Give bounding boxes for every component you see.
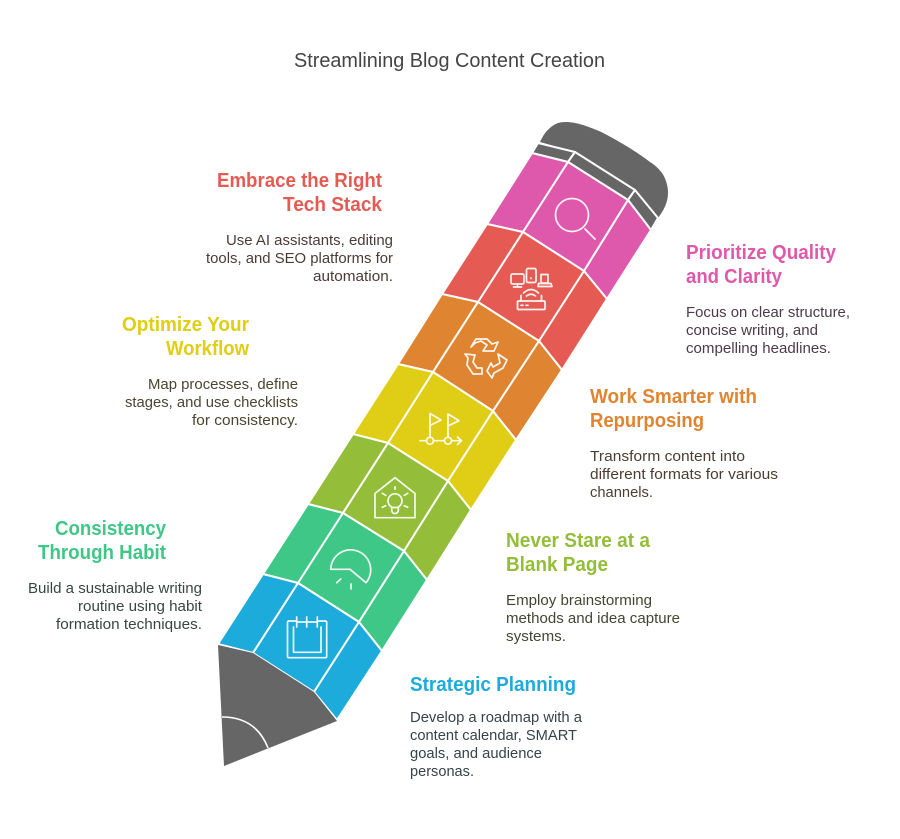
description: goals, and audience	[410, 746, 542, 762]
segment: orange	[398, 294, 562, 440]
description: personas.	[410, 764, 474, 780]
icon: house with light bulb	[375, 478, 415, 518]
icon: magnifier	[556, 198, 595, 239]
heading: Optimize Your	[122, 314, 249, 336]
label: embrace the right tech stack	[206, 170, 393, 285]
heading: Tech Stack	[283, 194, 383, 216]
icon: devices and router	[511, 268, 552, 310]
description	[28, 581, 202, 633]
title: Streamlining Blog Content Creation	[294, 50, 605, 72]
heading	[38, 518, 167, 564]
heading: Strategic Planning	[410, 674, 576, 696]
segment: green	[263, 504, 427, 651]
description	[410, 710, 583, 780]
description: Develop a roadmap with a	[410, 710, 583, 726]
heading	[217, 170, 383, 216]
label: work smarter with repurposing	[590, 386, 778, 501]
description: Focus on clear structure,	[686, 305, 850, 321]
heading: Work Smarter with	[590, 386, 757, 408]
description	[590, 449, 778, 501]
heading	[686, 242, 837, 288]
segment: olive	[308, 434, 471, 580]
description	[206, 233, 393, 285]
description: for consistency.	[192, 413, 298, 429]
label: never stare at a blank page	[506, 530, 680, 645]
segment: pink	[487, 153, 651, 299]
icon: calendar	[288, 617, 327, 658]
description: formation techniques.	[56, 617, 202, 633]
description: Use AI assistants, editing	[226, 233, 393, 249]
heading	[590, 386, 757, 432]
heading	[506, 530, 651, 576]
description: content calendar, SMART	[410, 728, 577, 744]
heading: Embrace the Right	[217, 170, 382, 192]
heading: Prioritize Quality	[686, 242, 837, 264]
description: routine using habit	[78, 599, 202, 615]
heading: and Clarity	[686, 266, 783, 288]
heading: Consistency	[55, 518, 167, 540]
heading: Workflow	[166, 338, 249, 360]
segment: blue	[218, 574, 382, 720]
pencil tip	[218, 645, 337, 766]
description: Build a sustainable writing	[28, 581, 202, 597]
segment: red	[442, 224, 607, 370]
heading: Repurposing	[590, 410, 704, 432]
description: systems.	[506, 629, 566, 645]
description: channels.	[590, 485, 653, 501]
description: compelling headlines.	[686, 341, 831, 357]
segment: yellow	[353, 364, 516, 510]
icon: gauge	[331, 550, 371, 589]
description: Employ brainstorming	[506, 593, 652, 609]
label: optimize your workflow	[122, 314, 298, 429]
label: strategic planning	[410, 674, 583, 780]
icon: recycle	[465, 339, 507, 378]
pencil	[218, 122, 668, 766]
description: concise writing, and	[686, 323, 818, 339]
heading: Never Stare at a	[506, 530, 651, 552]
description: Map processes, define	[148, 377, 298, 393]
label: consistency through habit	[28, 518, 202, 633]
description	[506, 593, 680, 645]
heading: Blank Page	[506, 554, 608, 576]
description: tools, and SEO platforms for	[206, 251, 393, 267]
description	[125, 377, 298, 429]
description: different formats for various	[590, 467, 778, 483]
label: prioritize quality and clarity	[686, 242, 850, 357]
description: automation.	[313, 269, 393, 285]
icon: flags on a timeline	[420, 414, 462, 444]
description	[686, 305, 850, 357]
heading: Through Habit	[38, 542, 166, 564]
description: stages, and use checklists	[125, 395, 298, 411]
eraser	[532, 122, 668, 230]
heading	[122, 314, 249, 360]
description: methods and idea capture	[506, 611, 680, 627]
description: Transform content into	[590, 449, 745, 465]
